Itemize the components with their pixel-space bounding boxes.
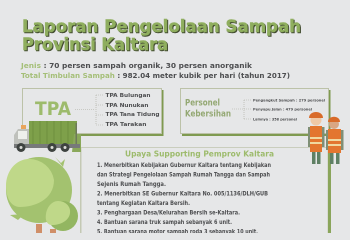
personel list: Lainnya : 358 personel <box>253 116 297 122</box>
personel heading: Kebersihan <box>185 110 231 120</box>
upaya list: dan Strategi Pengelolaan Sampah Rumah Tangga dan Sampah <box>97 172 270 178</box>
waste facts: Total Timbulan Sampah : 982.04 meter kubik per hari (tahun 2017) <box>21 72 290 80</box>
TPA list: TPA Tana Tidung <box>106 112 160 118</box>
TPA list: TPA Tarakan <box>106 122 147 128</box>
title: Provinsi Kaltara <box>23 36 169 56</box>
panel: TPA <box>22 88 164 136</box>
icon: garbage truck <box>14 121 81 152</box>
upaya list: 2. Menerbitkan SE Gubernur Kaltara No. 005/1136/DLH/GUB <box>97 192 269 198</box>
upaya heading: Upaya Supporting Pemprov Kaltara <box>125 150 274 158</box>
personel connector <box>232 100 251 119</box>
TPA heading: TPA <box>35 98 71 120</box>
waste facts <box>20 62 290 80</box>
personel list <box>253 98 325 122</box>
upaya list: 4. Bantuan sarana truk sampah sebanyak 6 unit. <box>97 220 232 226</box>
upaya list: 3. Penghargaan Desa/Kelurahan Bersih se-Kaltara. <box>97 210 240 216</box>
title: Laporan Pengelolaan Sampah <box>22 17 301 37</box>
upaya list: tentang Kegiatan Kaltara Bersih. <box>97 201 190 207</box>
TPA list <box>106 93 160 128</box>
TPA list: TPA Bulungan <box>106 93 151 99</box>
icon: cleaning workers <box>308 112 344 164</box>
title: Provinsi Kaltara <box>22 35 168 55</box>
waste facts: Jenis : 70 persen sampah organik, 30 persen anorganik <box>20 62 252 70</box>
personel heading <box>185 98 231 120</box>
personel list: Pengangkut Sampah : 279 personel <box>253 98 325 102</box>
worker left <box>308 112 324 164</box>
personel list: Penyapu Jalan : 479 personel <box>253 106 312 112</box>
panel: upaya supporting <box>80 148 331 236</box>
upaya list: Sejenis Rumah Tangga. <box>97 182 166 188</box>
upaya list: 1. Menerbitkan Kebijakan Gubernur Kaltara tentang Kebijakan <box>97 163 271 169</box>
personel heading: Personel <box>185 98 220 108</box>
upaya list <box>97 163 271 236</box>
title: Laporan Pengelolaan Sampah <box>23 18 302 38</box>
title <box>22 17 302 56</box>
panel: personel kebersihan <box>180 88 330 136</box>
worker right <box>326 117 344 164</box>
TPA connector <box>75 95 103 125</box>
icon: tree <box>6 157 78 233</box>
TPA list: TPA Nunukan <box>106 103 149 109</box>
